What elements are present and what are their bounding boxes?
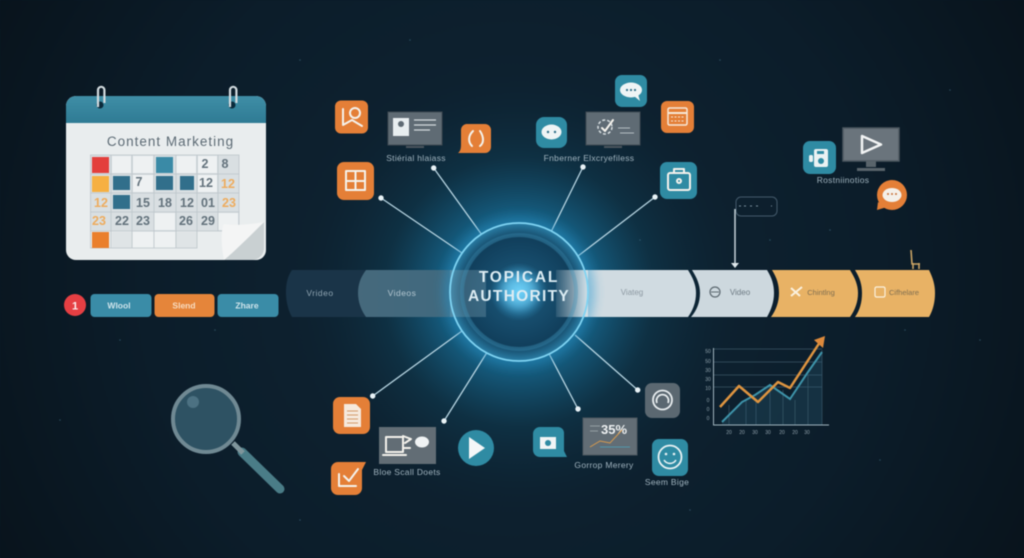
icon: teal video camera tile — [803, 141, 836, 174]
calendar grid: 18 — [158, 196, 172, 210]
monitor: target analytics — [586, 112, 640, 148]
monitor: laptop with chat — [379, 427, 436, 464]
calendar grid: 12 — [221, 177, 235, 191]
calendar: Content Marketing — [66, 87, 266, 260]
chart y-axis labels — [705, 349, 711, 422]
monitor: play — [843, 128, 899, 171]
label: Bloe Scall Doets: Bloe Scall Doets — [373, 467, 441, 477]
chart x-axis labels: 30 — [752, 430, 758, 436]
calendar grid: 23 — [136, 214, 150, 228]
calendar grid: 15 — [136, 196, 150, 210]
chart y-axis labels: 0 — [707, 407, 710, 413]
calendar rings — [96, 87, 236, 108]
calendar grid: 23 — [222, 196, 236, 210]
icon: book tile — [337, 162, 374, 200]
step number badge — [64, 294, 86, 316]
segment: Video: Video — [730, 288, 751, 297]
segment: Chintlng: Chintlng — [807, 288, 835, 297]
timeline bar — [286, 270, 935, 317]
chart x-axis labels: 20 — [739, 430, 745, 436]
step number badge: 1 — [72, 300, 78, 312]
calendar grid: 26 — [179, 214, 193, 228]
chart y-axis labels: 30 — [705, 377, 711, 383]
icon: gray target tile — [645, 383, 680, 418]
calendar grid: 29 — [201, 214, 215, 228]
pill: Wlool: Wlool — [107, 300, 131, 310]
calendar title: Content Marketing — [107, 134, 234, 149]
segment: Vrideo: Vrideo — [306, 288, 334, 298]
icon: orange chat headset — [458, 124, 491, 153]
icon: teal speech bubble — [536, 117, 567, 148]
calendar grid: 23 — [92, 214, 106, 228]
pill: Slend: Slend — [172, 300, 196, 310]
label: Rostniinotios: Rostniinotios — [817, 175, 869, 185]
calendar page curl — [222, 222, 264, 260]
segment: Vrideo — [286, 270, 366, 317]
chart y-axis labels: 0 — [707, 416, 710, 422]
small deer figure — [911, 250, 920, 269]
chart y-axis labels: 50 — [705, 349, 711, 355]
icon: teal camera bubble — [533, 427, 567, 457]
icon: document tile — [333, 397, 370, 434]
pill: Wlool — [90, 294, 152, 317]
pill: Zhare — [218, 294, 278, 317]
chart x-axis labels: 30 — [765, 430, 771, 436]
chart x-axis labels: 20 — [779, 430, 785, 436]
monitor: profile list — [388, 112, 442, 148]
magnifying glass — [173, 386, 280, 489]
calendar grid: 8 — [222, 157, 229, 171]
icon: photo person tile — [335, 100, 368, 134]
label: Stiérial hlaiass: Stiérial hlaiass — [386, 153, 446, 163]
segment: Chintlng — [771, 270, 858, 317]
icon: checkbox tile — [331, 462, 366, 495]
segment: Viateg — [575, 270, 696, 317]
calendar grid: 12 — [199, 176, 213, 190]
calendar grid: 01 — [201, 196, 215, 210]
icon: orange chat bubble — [877, 180, 907, 210]
icon: orange calendar tile — [661, 101, 694, 133]
segment: Videos: Videos — [388, 288, 416, 298]
line chart — [705, 336, 829, 436]
calendar grid: 2 — [202, 157, 209, 171]
segment: Cifhelare: Cifhelare — [889, 288, 919, 297]
callout box with arrow down to timeline — [731, 197, 777, 268]
chart y-axis labels: 30 — [705, 368, 711, 374]
icon: play button — [458, 430, 494, 466]
segment: Viateg: Viateg — [621, 288, 643, 297]
chart y-axis labels: 10 — [705, 386, 711, 392]
label: Gorrop Merery: Gorrop Merery — [574, 460, 634, 470]
pill: Zhare: Zhare — [235, 300, 259, 310]
label: Seem Bige: Seem Bige — [645, 477, 689, 487]
monitor: 35% chart: 35% — [601, 422, 627, 437]
central globe: Topical Authority: AUTHORITY — [468, 288, 570, 305]
globe title: TOPICAL — [479, 269, 559, 286]
icon: teal chat tile — [615, 75, 647, 107]
central globe: Topical Authority — [443, 216, 595, 368]
calendar grid — [90, 155, 239, 248]
icon: teal camera tile — [660, 162, 697, 199]
monitor: 35% chart — [583, 418, 637, 455]
chart x-axis labels — [726, 430, 810, 436]
chart x-axis labels: 30 — [804, 430, 810, 436]
calendar grid: 12 — [94, 196, 108, 210]
calendar grid: 12 — [180, 196, 194, 210]
calendar grid: 7 — [136, 175, 143, 189]
chart y-axis labels: 50 — [705, 359, 711, 365]
icon: smiley tile — [652, 439, 688, 476]
step pills row — [64, 294, 278, 317]
segment: Videos — [358, 270, 470, 317]
pill: Slend — [154, 294, 214, 317]
calendar grid: 22 — [115, 214, 129, 228]
connector lines with end dots — [370, 164, 658, 424]
chart x-axis labels: 20 — [792, 430, 798, 436]
segment: Video — [691, 270, 774, 317]
chart x-axis labels: 20 — [726, 430, 732, 436]
label: Fnberner Elxcryefiless: Fnberner Elxcryefiless — [544, 153, 634, 163]
segment: Cifhelare — [855, 270, 935, 317]
chart y-axis labels: 0 — [707, 398, 710, 404]
